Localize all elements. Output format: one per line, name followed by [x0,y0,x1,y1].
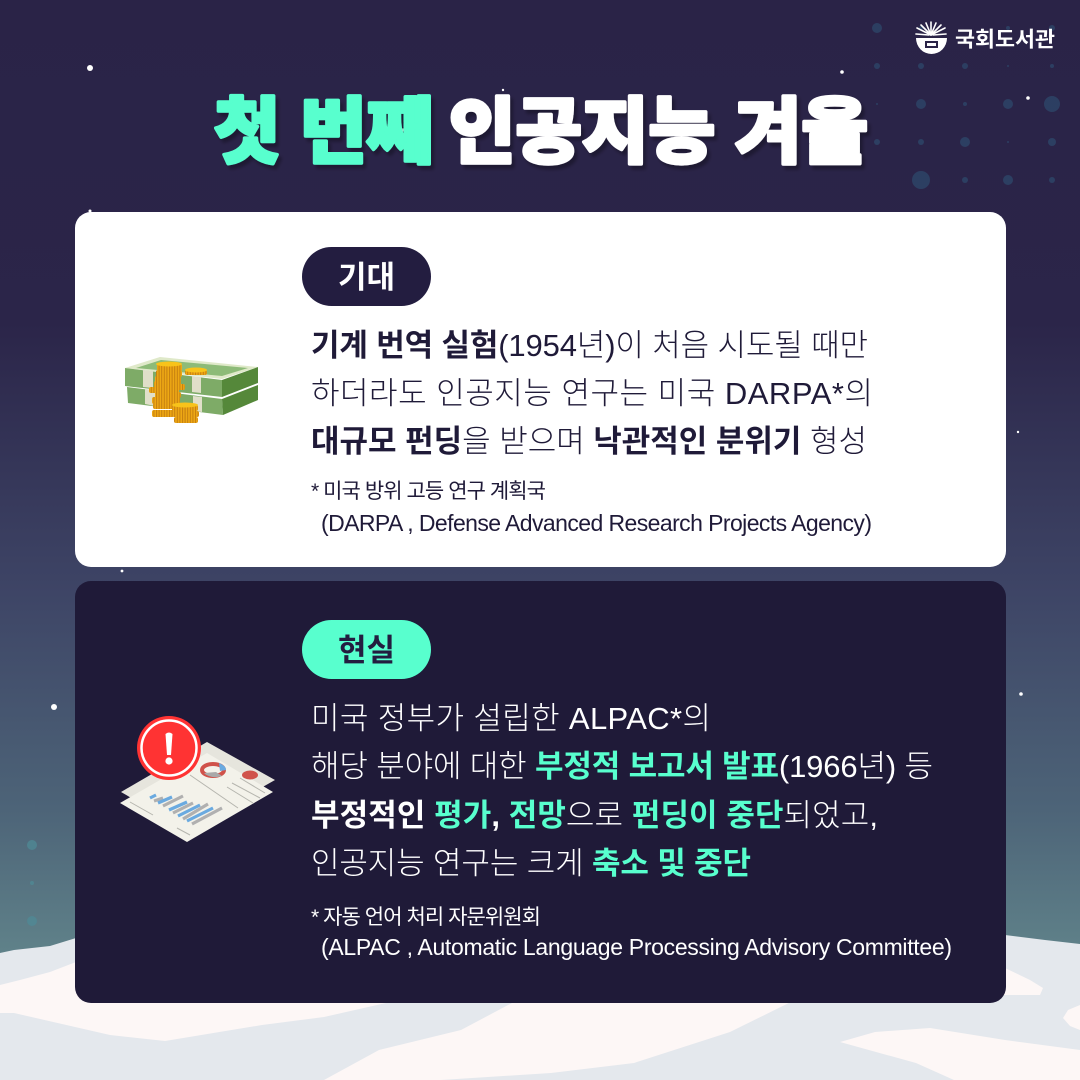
text: expectation body: 하더라도 인공지능 연구는 미국 DARPA*의 [311,376,873,411]
panel: reality [75,581,1006,1003]
badge: reality [302,620,431,679]
text: expectation footnote: * 미국 방위 고등 연구 계획국 [311,480,546,503]
text: expectation body [311,328,873,459]
text: reality footnote [311,906,952,960]
text: expectation footnote [311,480,872,536]
text: reality body [311,701,933,881]
badge: reality: 현실 [338,633,395,668]
text: reality body: 인공지능 연구는 크게 축소 및 중단 [311,846,751,881]
icon: stacks of money and coins [125,357,258,423]
icon: report documents with warning sign [120,716,275,842]
logo wordmark: 국회도서관 [955,28,1055,52]
text: expectation body: 대규모 펀딩을 받으며 낙관적인 분위기 형성 [311,424,867,459]
panel: expectation [75,212,1006,567]
text: reality body: 미국 정부가 설립한 ALPAC*의 [311,701,711,736]
text: expectation body: 기계 번역 실험(1954년)이 처음 시도될 때만 [311,328,868,363]
logo: National Assembly Library [916,22,1055,54]
text: expectation footnote: (DARPA , Defense Advanced Research Projects Agency) [321,510,872,536]
icon: open book with rays [916,22,947,54]
text: reality body: 해당 분야에 대한 부정적 보고서 발표(1966년) 등 [311,749,933,784]
badge: expectation: 기대 [338,260,395,295]
badge: expectation [302,247,431,306]
background: snowy mountains [0,900,1080,1080]
text: reality footnote: * 자동 언어 처리 자문위원회 [311,906,541,929]
title [214,93,868,173]
title: highlighted words: 첫 번째 [214,93,433,173]
title: white words: 인공지능 겨울 [449,93,868,173]
background: stars [27,23,1060,926]
text: reality body: 부정적인 평가, 전망으로 펀딩이 중단되었고, [311,798,878,833]
text: reality footnote: (ALPAC , Automatic Language Processing Advisory Committee) [321,934,952,960]
